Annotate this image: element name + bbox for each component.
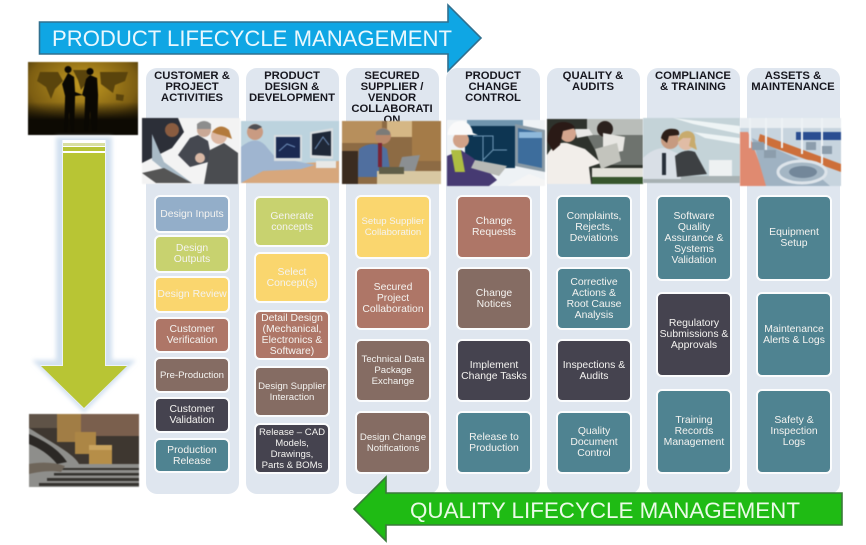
arrow: downward progress arrow — [32, 134, 136, 414]
heading: secured supplier vendor collaboration — [351, 70, 433, 126]
box: Pre-Production — [154, 357, 230, 393]
heading: secured supplier vendor collaboration: VENDOR — [368, 92, 416, 104]
heading: product change control: CHANGE — [469, 81, 517, 93]
box: Equipment Setup: Equipment — [769, 227, 819, 238]
box: Corrective Actions and Root Cause Analysis — [556, 267, 632, 330]
box: Maintenance Alerts and Logs: Maintenance — [764, 324, 824, 334]
photo: handshake over world map — [27, 61, 139, 136]
box: Regulatory Submissions and Approvals: Approvals — [671, 340, 717, 351]
photo: colleagues at a laptop — [642, 118, 740, 184]
box: Customer Verification: Customer — [169, 324, 215, 335]
box: Secured Project Collaboration: Secured — [374, 282, 412, 293]
box: Technical Data Package Exchange: Exchange — [372, 376, 414, 387]
heading: secured supplier vendor collaboration: ON — [384, 114, 400, 126]
box: Design Outputs — [154, 235, 230, 273]
heading: compliance and training — [655, 70, 731, 93]
box: Quality Document Control — [556, 411, 632, 474]
heading: quality and audits: AUDITS — [572, 81, 614, 93]
photo: scientist at microscope — [546, 118, 644, 185]
box: Equipment Setup: Setup — [780, 238, 808, 249]
box: Secured Project Collaboration — [355, 267, 431, 330]
box: Change Requests: Change — [476, 216, 512, 227]
box: Training Records Management: Records — [675, 426, 713, 437]
box: Software Quality Assurance and Systems Validation: Software — [673, 210, 714, 222]
box: Change Requests: Requests — [472, 227, 516, 238]
box: Design Review: Design Review — [157, 289, 227, 300]
panel: secured supplier collaboration — [346, 68, 439, 494]
box: Customer Verification — [154, 317, 230, 353]
box: Complaints, Rejects, Deviations — [556, 195, 632, 259]
box: Production Release — [154, 438, 230, 473]
panel: product design and development — [246, 68, 339, 494]
box: Regulatory Submissions and Approvals: Regulatory — [669, 318, 719, 329]
heading: customer and project activities: PROJECT — [165, 81, 219, 93]
box: Release to Production — [456, 411, 532, 474]
box: Corrective Actions and Root Cause Analysis: Corrective — [570, 276, 618, 288]
box: Design Change Notifications — [355, 411, 431, 474]
box: Training Records Management — [656, 389, 732, 474]
box: Customer Validation: Customer — [169, 404, 215, 415]
heading: product design and development — [249, 70, 335, 104]
heading: product change control: PRODUCT — [465, 70, 521, 82]
box: Regulatory Submissions and Approvals: Submissions & — [660, 329, 728, 340]
box: Design Outputs: Design — [176, 243, 208, 254]
box: Quality Document Control: Quality — [578, 426, 610, 437]
box: Design Review — [154, 276, 230, 313]
box: Quality Document Control: Document — [570, 437, 618, 448]
box: Generate concepts: concepts — [271, 222, 313, 232]
heading: customer and project activities — [154, 70, 230, 104]
box: Setup Supplier Collaboration: Collaboration — [365, 227, 421, 238]
box: Safety and Inspection Logs — [756, 389, 832, 474]
heading: secured supplier vendor collaboration: SUPPLIER / — [361, 81, 423, 93]
box: Detail Design — [254, 310, 330, 360]
box: Release CAD Models: Models, — [275, 438, 309, 448]
photo: team around a laptop — [141, 117, 240, 185]
arrow: product lifecycle management: PRODUCT LIFECYCLE MANAGEMENT — [52, 26, 452, 51]
box: Design Outputs: Outputs — [174, 254, 210, 265]
photo: factory assembly line — [739, 118, 842, 187]
box: Release CAD Models: Drawings, — [271, 448, 313, 460]
box: Corrective Actions and Root Cause Analysis: Actions & — [572, 288, 616, 298]
box: Release CAD Models: Parts & BOMs — [262, 460, 322, 470]
heading: assets and maintenance: ASSETS & — [765, 70, 821, 82]
box: Inspections and Audits: Audits — [580, 370, 608, 382]
box: Change Notices: Notices — [477, 298, 511, 310]
heading: quality and audits — [563, 70, 623, 93]
heading: product design and development: DEVELOPMENT — [249, 92, 335, 104]
box: Implement Change Tasks: Implement — [470, 360, 518, 370]
box: Change Notices — [456, 267, 532, 330]
box: Corrective Actions and Root Cause Analysis: Root Cause — [567, 298, 621, 310]
box: Design Change Notifications: Notifications — [367, 442, 419, 454]
heading: assets and maintenance: MAINTENANCE — [751, 81, 835, 93]
photo: boxes on conveyor — [28, 413, 140, 488]
heading: quality and audits: QUALITY & — [563, 70, 623, 82]
box: Select Concept(s) — [254, 252, 330, 303]
heading: product change control — [465, 70, 521, 104]
heading: customer and project activities: ACTIVITIES — [161, 92, 223, 104]
box: Inspections and Audits — [556, 339, 632, 402]
box: Release CAD Models — [254, 423, 330, 474]
box: Implement Change Tasks: Change Tasks — [461, 370, 527, 382]
heading: product change control: CONTROL — [465, 92, 521, 104]
box: Technical Data Package Exchange: Package — [374, 365, 412, 376]
box: Design Inputs — [154, 195, 230, 233]
box: Setup Supplier Collaboration: Setup Supplier — [362, 216, 424, 227]
box: Detail Design: (Mechanical, — [263, 324, 321, 335]
box: Pre-Production: Pre-Production — [160, 370, 224, 380]
arrow: quality lifecycle management — [353, 475, 843, 543]
box: Select Concept(s): Select — [278, 266, 306, 278]
heading: product design and development: PRODUCT — [264, 70, 320, 82]
box: Software Quality Assurance and Systems Validation: Quality — [678, 222, 710, 232]
box: Technical Data Package Exchange — [355, 339, 431, 402]
photo: engineer with hard hat at screens — [446, 119, 546, 187]
heading: product design and development: DESIGN & — [265, 81, 319, 93]
heading: customer and project activities: CUSTOMER & — [154, 70, 230, 82]
box: Safety and Inspection Logs: Inspection — [770, 426, 818, 437]
box: Complaints, Rejects, Deviations: Deviations — [570, 232, 618, 244]
heading: secured supplier vendor collaboration: SECURED — [364, 70, 420, 82]
photo: supplier at laptop in warehouse — [341, 120, 442, 185]
box: Software Quality Assurance and Systems Validation: Systems — [674, 244, 714, 254]
box: Implement Change Tasks — [456, 339, 532, 402]
box: Maintenance Alerts and Logs: Alerts & Logs — [763, 334, 825, 346]
box: Training Records Management: Training — [675, 415, 713, 426]
box: Safety and Inspection Logs: Logs — [783, 437, 805, 448]
box: Detail Design: Electronics & — [262, 335, 322, 346]
box: Change Notices: Change — [476, 288, 512, 298]
box: Change Requests — [456, 195, 532, 259]
box: Maintenance Alerts and Logs — [756, 292, 832, 377]
box: Technical Data Package Exchange: Technical Data — [362, 354, 424, 365]
box: Corrective Actions and Root Cause Analysis: Analysis — [575, 310, 613, 320]
box: Design Change Notifications: Design Change — [360, 432, 426, 442]
box: Inspections and Audits: Inspections & — [563, 360, 625, 370]
box: Release to Production: Production — [469, 442, 519, 454]
box: Safety and Inspection Logs: Safety & — [774, 415, 814, 426]
box: Setup Supplier Collaboration — [355, 195, 431, 259]
box: Customer Verification: Verification — [167, 335, 217, 346]
box: Production Release: Release — [173, 456, 211, 466]
box: Secured Project Collaboration: Collaboration — [362, 304, 424, 315]
photo: engineer at dual monitors — [240, 120, 340, 184]
heading: compliance and training: & TRAINING — [660, 81, 726, 93]
box: Software Quality Assurance and Systems Validation — [656, 195, 732, 281]
box: Design Supplier Interaction: Design Supplier — [258, 380, 326, 392]
box: Complaints, Rejects, Deviations: Rejects, — [575, 222, 613, 232]
box: Quality Document Control: Control — [577, 448, 611, 459]
box: Production Release: Production — [167, 444, 217, 456]
panel: customer and project activities — [146, 68, 239, 494]
panel: compliance and training — [647, 68, 740, 494]
box: Customer Validation: Validation — [170, 415, 214, 426]
box: Complaints, Rejects, Deviations: Complaints, — [567, 210, 621, 222]
box: Detail Design: Detail Design — [261, 313, 323, 324]
box: Regulatory Submissions and Approvals — [656, 292, 732, 377]
box: Software Quality Assurance and Systems Validation: Assurance & — [665, 232, 723, 244]
box: Equipment Setup — [756, 195, 832, 281]
box: Design Inputs: Design Inputs — [160, 208, 224, 220]
panel: quality and audits — [547, 68, 640, 494]
box: Detail Design: Software) — [270, 346, 314, 357]
box: Training Records Management: Management — [664, 437, 724, 448]
box: Select Concept(s): Concept(s) — [267, 278, 317, 288]
panel: assets and maintenance — [747, 68, 840, 494]
panel: product change control — [446, 68, 540, 494]
box: Release CAD Models: Release – CAD — [259, 426, 325, 438]
heading: compliance and training: COMPLIANCE — [655, 70, 731, 82]
box: Customer Validation — [154, 397, 230, 433]
arrow: product lifecycle management — [38, 3, 482, 73]
heading: assets and maintenance — [751, 70, 835, 93]
box: Design Supplier Interaction — [254, 366, 330, 417]
box: Software Quality Assurance and Systems Validation: Validation — [672, 254, 716, 266]
arrow: quality lifecycle management: QUALITY LIFECYCLE MANAGEMENT — [410, 498, 800, 523]
heading: secured supplier vendor collaboration: COLLABORATI — [351, 103, 433, 115]
box: Secured Project Collaboration: Project — [377, 293, 409, 304]
box: Generate concepts: Generate — [270, 210, 314, 222]
box: Design Supplier Interaction: Interaction — [270, 392, 314, 402]
box: Release to Production: Release to — [469, 432, 519, 442]
box: Generate concepts — [254, 196, 330, 247]
